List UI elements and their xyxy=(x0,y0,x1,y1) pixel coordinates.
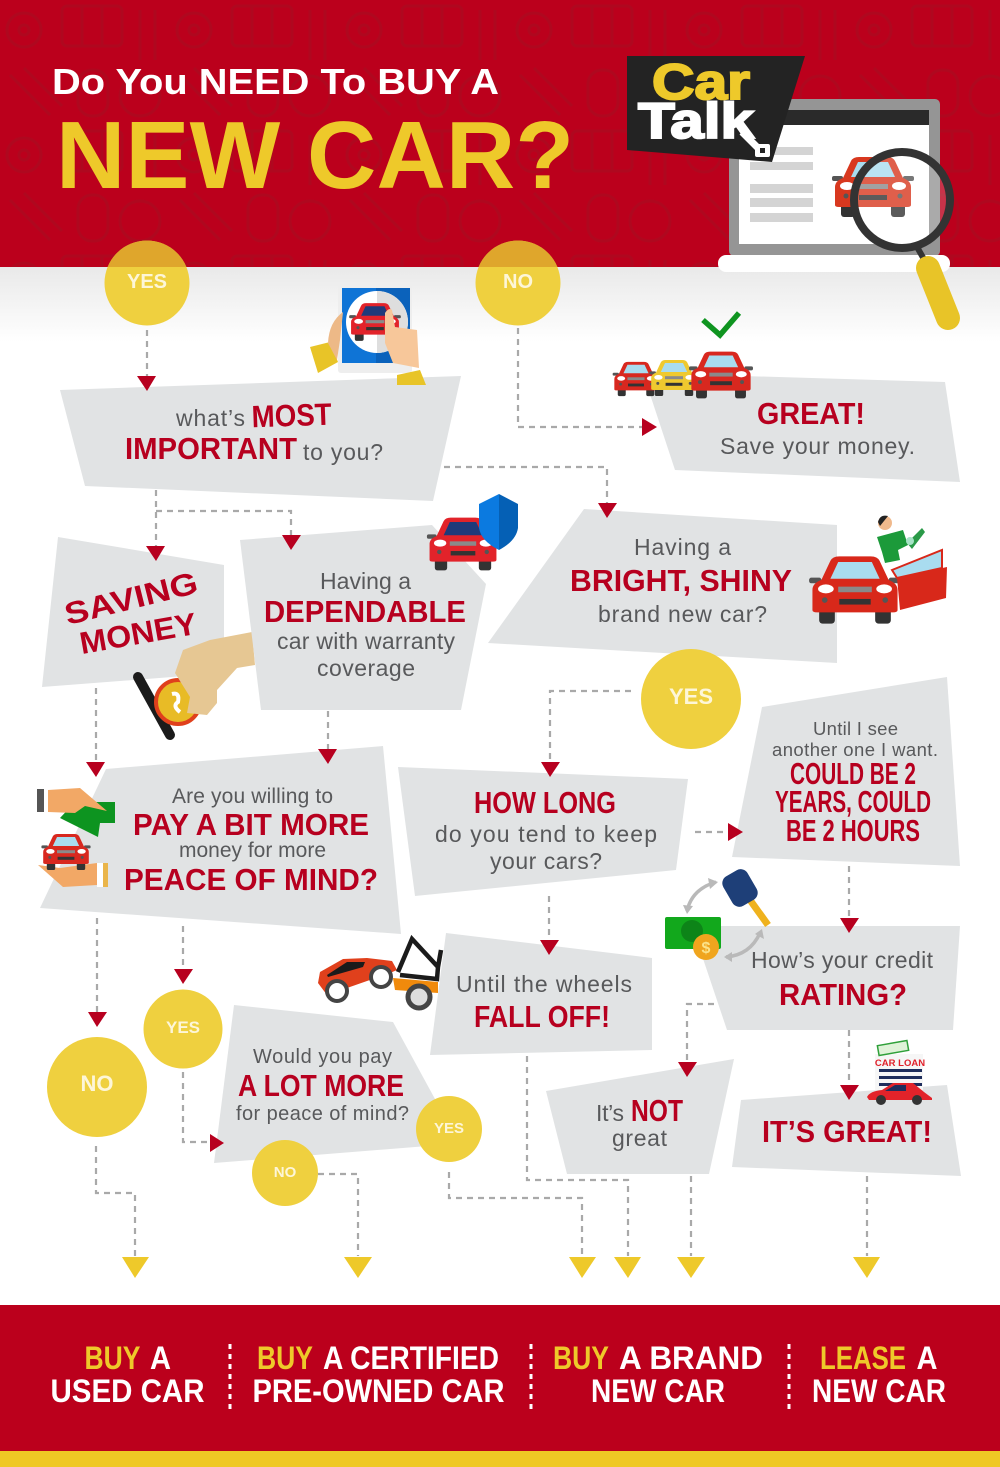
icon: man with bottle and red car xyxy=(809,516,947,624)
footer band xyxy=(0,1305,1000,1467)
outcome: buy a certified pre-owned car: BUY xyxy=(257,1340,313,1376)
panel: it's not great: great xyxy=(612,1125,668,1151)
icon: approved car loan: CAR LOAN xyxy=(875,1058,925,1069)
panel: until the wheels fall off: FALL OFF! xyxy=(474,999,610,1034)
panel: until I see another: Until I see xyxy=(813,718,898,739)
panel: would you pay: Would you pay xyxy=(253,1046,392,1068)
panel: what's most important xyxy=(60,376,461,501)
outcome: lease a new car: A xyxy=(916,1340,938,1376)
fade band below header xyxy=(0,267,1000,342)
yes circle small: YES xyxy=(434,1120,464,1137)
outcome: buy a certified pre-owned car: A CERTIFIED xyxy=(323,1340,499,1376)
icon: tow truck with car xyxy=(318,939,441,1008)
icon: money and key: $ xyxy=(702,940,711,957)
panel: bright shiny: Having a xyxy=(634,534,731,560)
panel: what's most important: IMPORTANT xyxy=(125,431,297,466)
icon: hands exchanging money for car xyxy=(37,788,115,887)
panel: bright shiny: BRIGHT, SHINY xyxy=(570,563,792,598)
panel: great save your money xyxy=(643,373,960,482)
no circle top xyxy=(476,240,560,326)
icon: hand dropping coin in slot xyxy=(138,632,255,735)
panel: until I see another: COULD BE 2 xyxy=(790,756,916,791)
panel: pay a bit more: PEACE OF MIND? xyxy=(124,862,378,897)
outcome: buy a used car: BUY xyxy=(84,1340,140,1376)
panel: great save your money: GREAT! xyxy=(757,396,865,431)
yes circle left xyxy=(144,990,222,1068)
outcome: buy a used car: USED CAR xyxy=(50,1373,204,1409)
yes circle bright xyxy=(641,649,741,749)
panel: pay a bit more: money for more xyxy=(179,839,326,862)
outcome: buy a brand new car xyxy=(553,1340,763,1409)
panel: what's most important: what’s xyxy=(175,405,245,431)
panel: credit rating: How’s your credit xyxy=(751,947,934,973)
panel: how long: HOW LONG xyxy=(474,785,616,820)
outcome: buy a brand new car: BUY xyxy=(553,1340,609,1376)
illustration: laptop with magnifier xyxy=(718,99,950,318)
panel: dependable car: Having a xyxy=(320,568,411,594)
yes circle left: YES xyxy=(166,1018,200,1037)
no circle left xyxy=(47,1037,147,1137)
panel: what's most important: MOST xyxy=(251,397,332,434)
panel: pay a bit more: Are you willing to xyxy=(172,785,333,808)
panel: credit rating xyxy=(692,926,960,1030)
panel: saving money: SAVING xyxy=(61,565,201,632)
panel: how long: do you tend to keep xyxy=(435,821,657,847)
panel: how long: your cars? xyxy=(490,848,602,874)
logo: Car Talk xyxy=(627,54,805,162)
outcome: buy a used car: A xyxy=(150,1340,171,1376)
outcome: buy a brand new car: A BRAND xyxy=(619,1340,763,1376)
no circle left: NO xyxy=(80,1071,114,1096)
panel: what's most important: to you? xyxy=(303,439,383,465)
panel: would you pay xyxy=(214,1005,441,1163)
connectors and arrows xyxy=(86,328,880,1278)
logo: Car Talk: Car xyxy=(652,54,750,110)
yes circle top xyxy=(104,240,190,326)
panel: dependable car: DEPENDABLE xyxy=(264,594,466,629)
title: Do You NEED To BUY A xyxy=(52,61,499,102)
panel: would you pay: for peace of mind? xyxy=(236,1103,409,1125)
panel: until I see another xyxy=(732,677,960,866)
header background xyxy=(0,0,1000,267)
panel: until I see another: BE 2 HOURS xyxy=(786,813,920,848)
title: NEW CAR? xyxy=(56,102,574,209)
icon: car with shield xyxy=(427,494,518,570)
panel: great save your money: Save your money. xyxy=(720,433,915,459)
yes circle small xyxy=(416,1096,482,1162)
no circle small xyxy=(252,1140,318,1206)
icon: approved car loan xyxy=(867,1040,932,1105)
panel: dependable car xyxy=(240,525,486,710)
panel: credit rating: RATING? xyxy=(779,977,907,1012)
panel: it's not great xyxy=(546,1059,734,1174)
panel: until I see another: another one I want. xyxy=(772,739,938,760)
panel: pay a bit more: PAY A BIT MORE xyxy=(133,807,369,842)
panel: until the wheels fall off: Until the wheels xyxy=(456,971,632,997)
panel: it's not great: It’s xyxy=(596,1100,624,1126)
panel: it's not great: NOT xyxy=(631,1093,683,1128)
icon: money and key xyxy=(665,866,768,962)
panel: would you pay: A LOT MORE xyxy=(238,1068,404,1103)
panel: it's great xyxy=(732,1085,961,1176)
panel: it's great: IT’S GREAT! xyxy=(762,1114,932,1149)
yes circle bright: YES xyxy=(669,684,713,709)
panel: bright shiny: brand new car? xyxy=(598,601,767,627)
panel: pay a bit more xyxy=(40,746,401,934)
outcome: buy a certified pre-owned car: PRE-OWNED CAR xyxy=(252,1373,504,1409)
panel: dependable car: car with warranty xyxy=(277,628,456,654)
logo: Car Talk: Talk xyxy=(638,93,754,149)
panel: saving money: MONEY xyxy=(77,606,200,661)
icon: hands holding tablet with car xyxy=(310,285,426,385)
panel: bright shiny xyxy=(488,509,837,663)
panel: saving money xyxy=(42,537,224,687)
no circle top: NO xyxy=(503,271,533,293)
outcome: buy a used car xyxy=(50,1340,204,1409)
yes circle top: YES xyxy=(127,271,167,293)
no circle small: NO xyxy=(274,1164,297,1181)
icon: three cars and check mark xyxy=(613,313,753,398)
outcome: lease a new car: LEASE xyxy=(820,1340,906,1376)
panel: until the wheels fall off xyxy=(430,933,652,1055)
panel: how long xyxy=(398,767,688,896)
outcome: buy a certified pre-owned car xyxy=(252,1340,504,1409)
panel: dependable car: coverage xyxy=(317,655,415,681)
outcome: buy a brand new car: NEW CAR xyxy=(591,1373,725,1409)
outcome: lease a new car: NEW CAR xyxy=(812,1373,946,1409)
outcome: lease a new car xyxy=(812,1340,946,1409)
